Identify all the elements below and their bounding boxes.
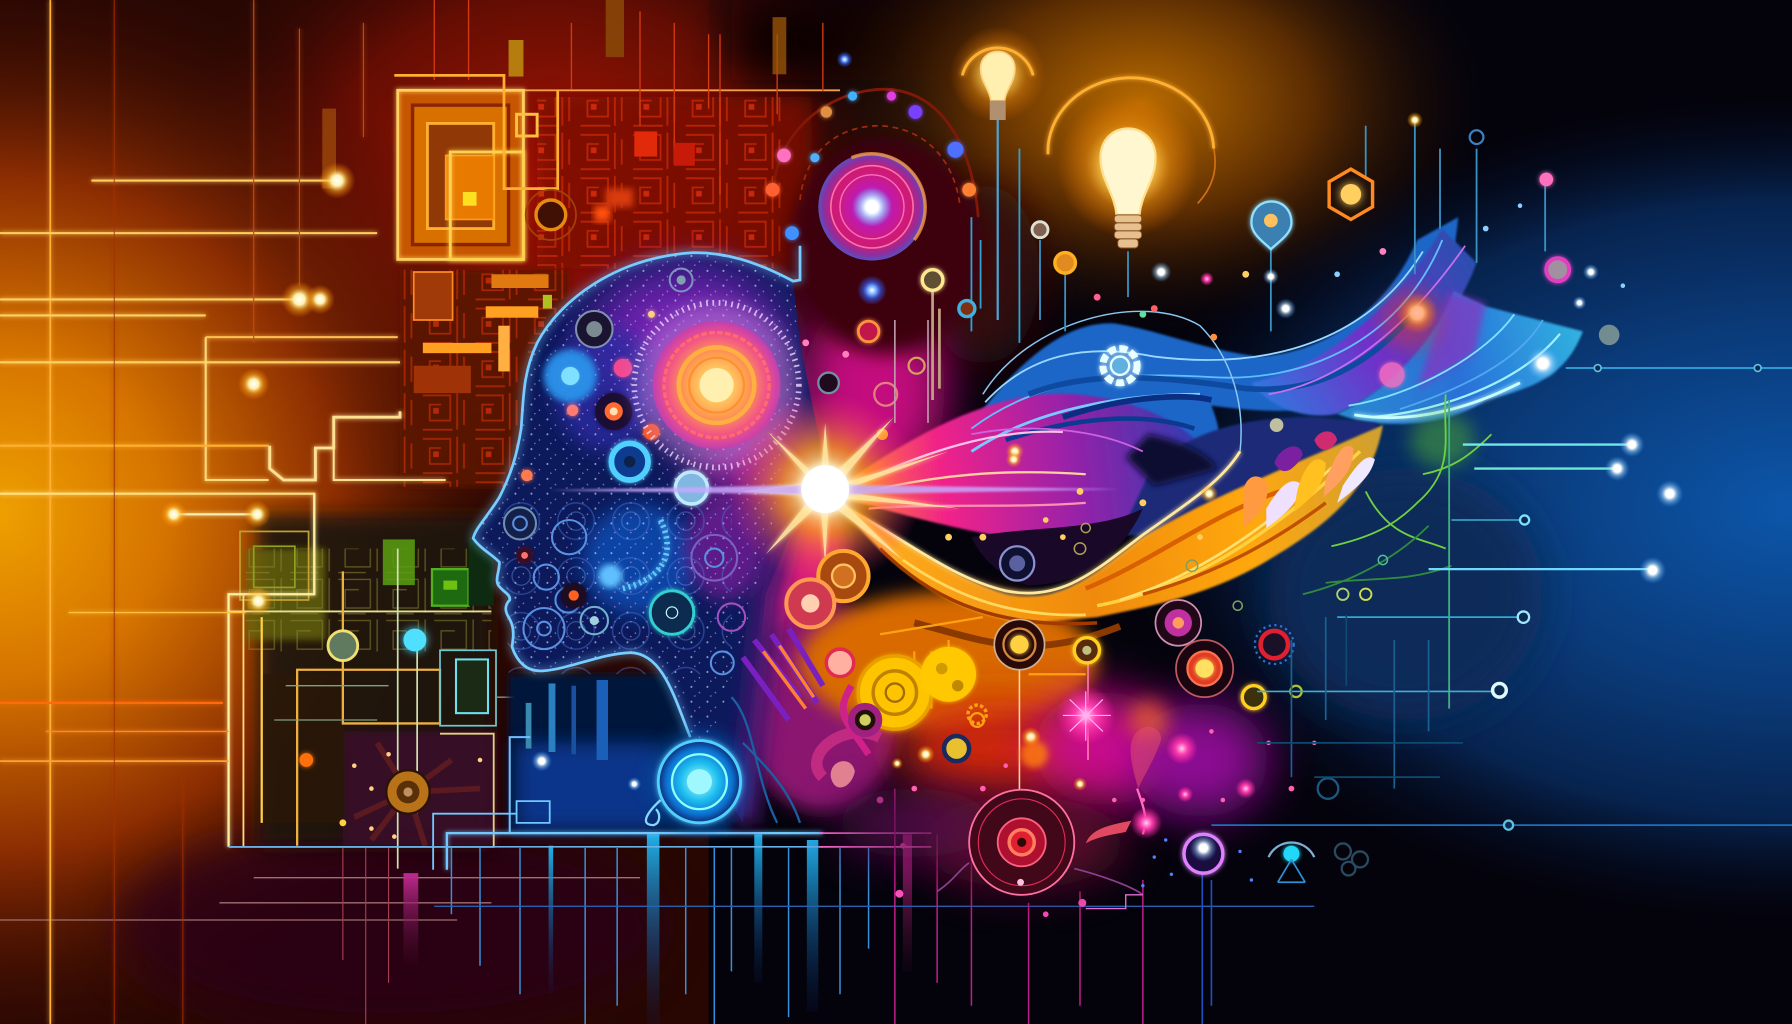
bottom grid with vertical light bars — [229, 789, 1314, 1024]
bulb: large lamp — [1048, 78, 1215, 248]
left gold circuit lines — [0, 0, 446, 1024]
icon: cog on stream — [1103, 349, 1137, 383]
bulb: top small lamp — [950, 26, 1046, 320]
icon: red target lower centre — [937, 790, 1143, 909]
icon: magenta ring — [1546, 258, 1569, 281]
head inner gears — [504, 269, 745, 674]
orb: magenta target — [766, 51, 978, 377]
thin rising connector lines with nodes — [922, 120, 1545, 400]
icon: cyan disc gear at neck — [646, 734, 747, 830]
sparkle dots around lines — [1094, 112, 1625, 345]
central light flare — [550, 392, 1120, 586]
icon: faint flower bottom right — [1318, 778, 1368, 875]
lamp posts and lower centre rings — [944, 546, 1302, 840]
right side light lines — [1211, 368, 1792, 825]
right line end nodes — [1493, 365, 1761, 830]
panel: gold swirl cluster — [731, 551, 1120, 823]
panel: lower left circuit block — [0, 494, 640, 1024]
panel: orange concentric chip — [394, 75, 576, 259]
green circuit branches — [1303, 394, 1491, 709]
head neural glows — [517, 311, 707, 634]
panel: colour haze around head — [706, 137, 1269, 888]
head silhouette — [473, 246, 823, 823]
icon: small blue balloon bulb — [1251, 201, 1291, 249]
glowing nodes on left lines — [160, 162, 426, 826]
panel: blue circuit block under chin — [433, 674, 731, 870]
orb: large orange target in head — [634, 303, 799, 467]
flowing stream: filled masses — [840, 217, 1583, 623]
panel: red circuit board, upper centre — [322, 0, 840, 487]
icon: cyan node bottom — [1269, 842, 1314, 882]
icon: purple ring bottom — [1184, 834, 1223, 873]
stream sparkle lights — [945, 290, 1560, 610]
colourful petals in stream — [1243, 418, 1375, 528]
flowing stream: strands — [841, 240, 1560, 624]
magenta column details — [802, 320, 928, 440]
icon: orange hexagon — [1329, 169, 1373, 219]
icon: bronze cog, lower left — [352, 743, 482, 846]
burst sparks, lower centre — [891, 686, 1317, 887]
